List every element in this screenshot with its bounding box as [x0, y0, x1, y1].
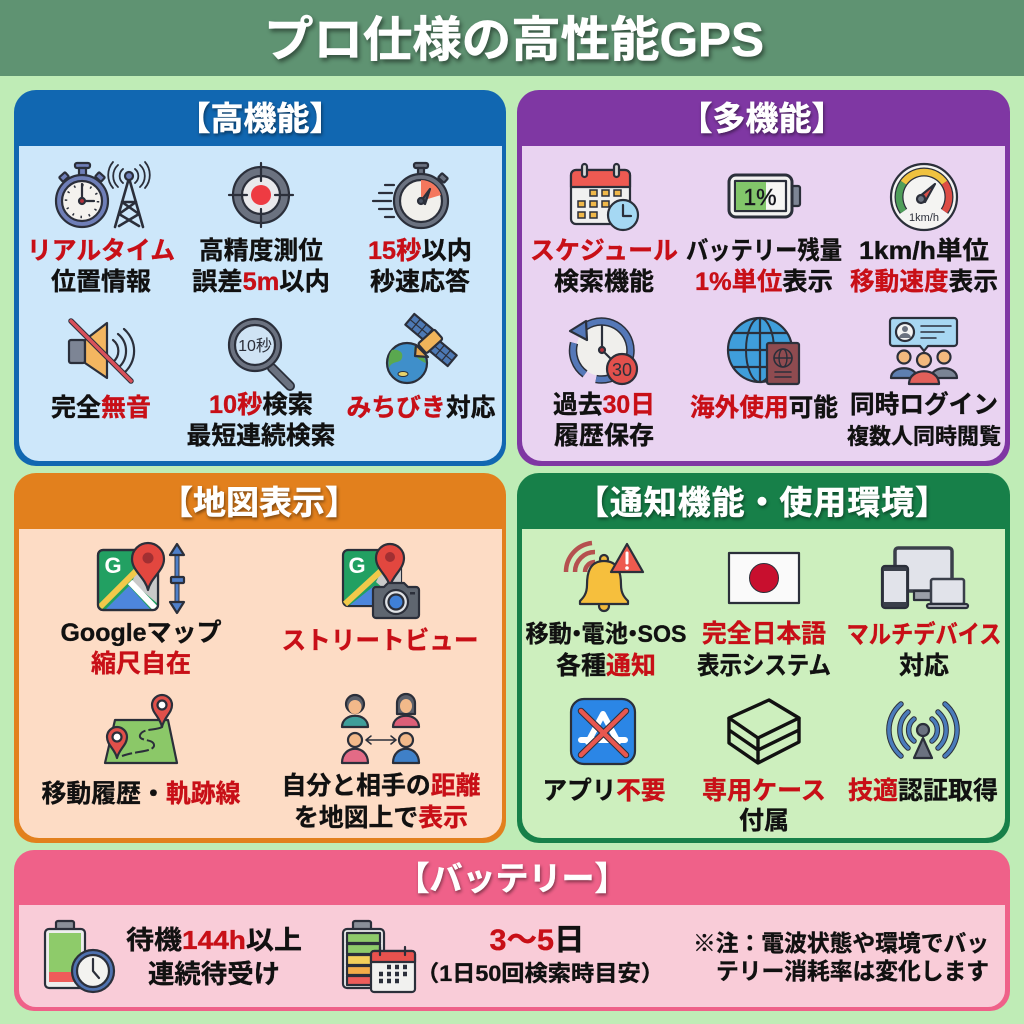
label: 15秒以内: [368, 237, 472, 296]
label: 自分と相手の距離: [282, 772, 481, 832]
icon: street view map and camera: [343, 544, 419, 618]
label: スケジュール: 検索機能: [554, 268, 654, 296]
label: 同時ログイン: 同時ログイン: [850, 390, 998, 419]
label: リアルタイム位置情報: リアルタイム: [27, 237, 175, 265]
icon: history clock 30: 30: [612, 360, 632, 380]
label: バッテリー残量: [686, 236, 842, 296]
label: バッテリー残量: バッテリー残量: [686, 236, 842, 265]
label: 専用ケース付属: [702, 777, 826, 835]
label: 完全無音: 完全無音: [51, 394, 151, 422]
label: 完全日本語: 表示システム: [697, 652, 831, 680]
note: [693, 930, 989, 984]
label: 1km/h単位: [850, 237, 998, 296]
icon: multi devices: [882, 548, 968, 608]
label: 10秒検索: [186, 391, 336, 450]
panel: バッテリー: [14, 850, 1010, 1011]
icon: case box: [729, 700, 799, 763]
label: 10秒検索: 最短連続検索: [186, 422, 336, 450]
icon: history clock 30: [570, 321, 637, 384]
text: 待機144h以上 連続待受け: [126, 925, 302, 989]
icon: satellite and earth: [387, 314, 457, 383]
text: 3〜5日: 3〜5日: [490, 924, 584, 957]
icon: speedometer: 1km/h: [909, 212, 939, 224]
label: 技適認証取得: 技適認証取得: [848, 777, 998, 805]
label: 過去30日: 過去30日: [553, 391, 655, 419]
icon: google map with zoom: G: [104, 553, 122, 578]
icon: target: [229, 163, 293, 227]
label: 移動・電池・SOS: 各種通知: [556, 652, 656, 680]
label: 移動履歴・軌跡線: 移動履歴・軌跡線: [42, 780, 240, 808]
icon: alert bell: [566, 543, 643, 611]
label: スケジュール: スケジュール: [530, 237, 678, 265]
icon: fast stopwatch: [373, 163, 448, 228]
icon: magnifier 10秒: 10秒: [238, 337, 272, 355]
icon: globe and passport: [728, 318, 799, 384]
panel: 多機能: [517, 90, 1010, 466]
label: マルチデバイス: 対応: [899, 652, 949, 680]
label: 過去30日: [553, 391, 655, 450]
label: 高精度測位: [192, 237, 330, 296]
icon: users and chat: [890, 318, 957, 384]
label: 自分と相手の距離: 自分と相手の距離: [282, 772, 481, 800]
icon: stopwatch and tower: [56, 162, 150, 227]
label: 高精度測位: 誤差5m以内: [192, 268, 330, 296]
label: アプリ不要: アプリ不要: [542, 777, 666, 805]
icon: Japanese flag: [729, 553, 799, 603]
label: 同時ログイン: [847, 390, 1001, 449]
label: 完全日本語: 完全日本語: [702, 620, 826, 648]
icon: battery with calendar: [343, 921, 415, 992]
icon: mute speaker: [69, 321, 134, 381]
note: ※注：電波状態や環境でバッ: [693, 930, 989, 956]
label: リアルタイム位置情報: 位置情報: [51, 268, 151, 296]
text: 待機144h以上 連続待受け: 待機144h以上: [126, 925, 302, 955]
label: 専用ケース付属: 専用ケース: [702, 777, 826, 805]
icon: calendar clock: [571, 164, 638, 230]
label: 15秒以内: 秒速応答: [370, 268, 470, 296]
icon: app not required: [571, 699, 635, 764]
heading: 地図表示: 【地図表示】: [160, 484, 358, 521]
icon: magnifier 10秒: [229, 319, 290, 386]
label: 15秒以内: 15秒以内: [368, 237, 472, 265]
label: 海外使用可能: 海外使用可能: [690, 394, 838, 422]
icon: street view map and camera: G: [348, 553, 366, 578]
label: Googleマップ: Googleマップ: [60, 619, 222, 647]
icon: google map with zoom: [98, 543, 184, 613]
text: 3〜5日: （1日50回検索時目安）: [416, 961, 664, 986]
label: 移動・電池・SOS: 移動・電池・SOS: [526, 621, 686, 648]
title banner: プロ仕様の高性能GPS: [264, 14, 764, 67]
label: マルチデバイス: マルチデバイス: [846, 620, 1002, 649]
panel: 高機能: [14, 90, 506, 466]
heading: 高機能: 【高機能】: [178, 100, 342, 137]
label: 移動・電池・SOS: [526, 621, 686, 680]
label: 1km/h単位: 1km/h単位: [859, 237, 989, 265]
heading: 通知機能・使用環境: 【通知機能・使用環境】: [576, 484, 948, 521]
icon: two pairs of people and distance arrow: [342, 694, 419, 763]
text: 待機144h以上 連続待受け: 連続待受け: [148, 959, 280, 989]
label: 高精度測位: 高精度測位: [199, 237, 323, 265]
label: Googleマップ: 縮尺自在: [91, 650, 191, 678]
icon: speedometer: [891, 164, 957, 230]
label: 1km/h単位: 移動速度表示: [850, 268, 998, 296]
title banner: [0, 0, 1024, 76]
icon: battery with clock: [45, 921, 114, 992]
panel: 地図表示: [14, 473, 506, 843]
label: 専用ケース付属: 付属: [739, 807, 789, 835]
label: 完全日本語: [697, 620, 831, 680]
label: みちびき対応: みちびき対応: [346, 394, 496, 422]
icon: battery 1%: 1%: [743, 184, 777, 210]
label: 自分と相手の距離: を地図上で表示: [294, 804, 468, 832]
label: リアルタイム位置情報: [27, 237, 175, 296]
heading: 多機能: 【多機能】: [680, 100, 844, 137]
icon: battery 1%: [729, 175, 800, 217]
icon: radio certification: [889, 704, 957, 758]
label: 過去30日: 履歴保存: [554, 422, 654, 450]
label: スケジュール: [530, 237, 678, 296]
label: 10秒検索: 10秒検索: [209, 391, 313, 419]
panel: 通知機能・使用環境: [517, 473, 1010, 843]
label: Googleマップ: [60, 619, 222, 678]
icon: route map: [105, 695, 177, 763]
heading: バッテリー: 【バッテリー】: [396, 860, 628, 897]
label: 同時ログイン: 複数人同時閲覧: [847, 424, 1001, 449]
label: バッテリー残量: 1%単位表示: [695, 268, 833, 296]
note: テリー消耗率は変化します: [716, 958, 989, 984]
label: ストリートビュー: ストリートビュー: [282, 627, 478, 655]
label: マルチデバイス: [846, 620, 1002, 680]
text: 3〜5日: [416, 924, 664, 986]
